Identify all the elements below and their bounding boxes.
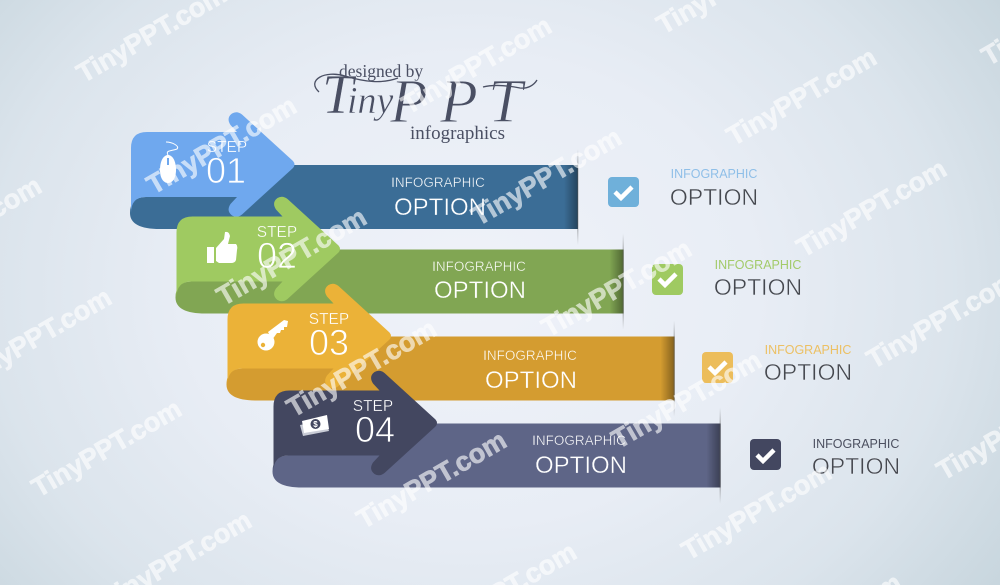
- logo: designed by TinyPPT infographics: iny: [347, 80, 394, 122]
- option 2 label on band: OPTION: [434, 277, 526, 304]
- ribbon step 3: [226, 284, 675, 416]
- logo: designed by TinyPPT infographics: infographics: [410, 123, 505, 144]
- checkbox 3: [702, 352, 733, 383]
- step 2 label: 02: [257, 235, 297, 276]
- watermarks: TinyPPT.com: [721, 42, 882, 152]
- ribbon step 2: [176, 197, 624, 330]
- step 1 label: 01: [206, 150, 246, 191]
- watermarks: TinyPPT.com: [676, 456, 837, 566]
- watermarks: TinyPPT.com: [396, 10, 557, 120]
- option 1 label on band: OPTION: [394, 194, 486, 221]
- step 4 label: STEP: [353, 398, 393, 415]
- band 4 with fold: [272, 408, 721, 504]
- side label 1: INFOGRAPHIC: [671, 167, 757, 181]
- side label 3: [764, 343, 852, 385]
- step 1 label: STEP: [207, 139, 247, 156]
- icon: thumbs up: [207, 232, 237, 263]
- side label 2: [714, 258, 802, 300]
- side label 1: [670, 167, 758, 210]
- arrow 2: [176, 197, 340, 301]
- logo: designed by TinyPPT infographics: PPT: [389, 68, 527, 136]
- band 1 end shadow: [564, 149, 578, 245]
- ribbon step 4: [272, 371, 721, 504]
- step 4 label: 04: [355, 409, 395, 450]
- side label 2: INFOGRAPHIC: [715, 258, 801, 272]
- logo: designed by TinyPPT infographics: designed by: [339, 61, 423, 81]
- arrow 3: [228, 284, 391, 388]
- icon: mouse: [160, 142, 178, 183]
- arrow 1: [131, 112, 294, 217]
- icon: key: [258, 320, 288, 350]
- option 1 label on band: [391, 175, 486, 221]
- band 1 with fold: [130, 165, 578, 229]
- step 3 label: 03: [309, 322, 349, 363]
- option 3 label on band: INFOGRAPHIC: [483, 348, 577, 363]
- option 4 label on band: OPTION: [535, 452, 627, 479]
- watermarks: TinyPPT.com: [281, 313, 442, 423]
- option 3 label on band: OPTION: [485, 367, 577, 394]
- ribbon step 1: [130, 112, 578, 245]
- watermarks: TinyPPT.com: [211, 202, 372, 312]
- watermarks: TinyPPT.com: [351, 425, 512, 535]
- checkbox 1: [608, 177, 639, 207]
- side label 4: OPTION: [812, 453, 900, 479]
- option 1 label on band: INFOGRAPHIC: [391, 175, 485, 190]
- icon: banknotes: [300, 415, 329, 436]
- option 2 label on band: [432, 259, 526, 304]
- watermarks: TinyPPT.com: [141, 90, 302, 200]
- watermarks: TinyPPT.com: [26, 393, 187, 503]
- logo: designed by TinyPPT infographics: [315, 61, 537, 144]
- option 4 label on band: INFOGRAPHIC: [532, 433, 626, 448]
- watermarks: TinyPPT.com: [466, 122, 627, 232]
- option 2 label on band: INFOGRAPHIC: [432, 259, 526, 274]
- icon: banknotes: $: [313, 420, 318, 429]
- step 2 label: STEP: [257, 224, 297, 241]
- band 3 with fold: [226, 320, 675, 416]
- side label 1: OPTION: [670, 184, 758, 210]
- arrow 4: [274, 371, 437, 475]
- watermarks: TinyPPT.com: [791, 153, 952, 263]
- option 4 label on band: [532, 433, 627, 479]
- side label 2: OPTION: [714, 274, 802, 300]
- side label 3: INFOGRAPHIC: [765, 343, 851, 357]
- watermarks: TinyPPT.com: [536, 233, 697, 343]
- side label 4: INFOGRAPHIC: [813, 437, 899, 451]
- watermarks: TinyPPT.com: [606, 345, 767, 455]
- step 3 label: STEP: [309, 311, 349, 328]
- option 3 label on band: [483, 348, 577, 394]
- band 2 with fold: [176, 234, 624, 330]
- side label 3: OPTION: [764, 359, 852, 385]
- checkbox 4: [750, 439, 781, 470]
- logo: designed by TinyPPT infographics: T: [322, 64, 357, 126]
- side label 4: [812, 437, 900, 479]
- checkbox 2: [652, 264, 683, 295]
